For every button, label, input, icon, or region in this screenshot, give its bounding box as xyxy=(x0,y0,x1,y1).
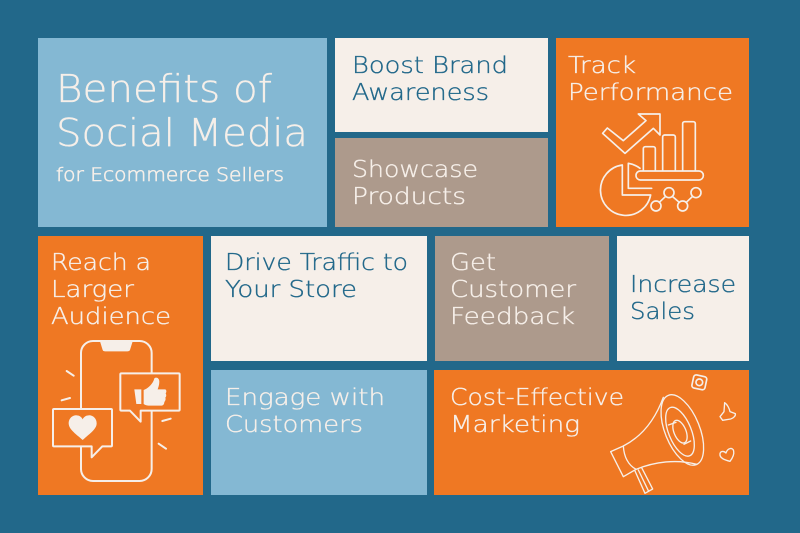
panel: Get Customer Feedback xyxy=(435,236,609,361)
panel: Increase Sales: Increase xyxy=(630,270,736,298)
panel: Increase Sales: Sales xyxy=(630,297,695,325)
panel: Cost-Effective Marketing: Marketing xyxy=(450,410,580,438)
panel: Showcase Products: Products xyxy=(352,182,466,210)
subheading: for Ecommerce Sellers xyxy=(56,164,284,186)
icon: analytics chart xyxy=(600,114,703,215)
panel: Track Performance: Performance xyxy=(568,78,733,106)
panel: Get Customer Feedback: Feedback xyxy=(450,302,575,330)
panel: Track Performance: Track xyxy=(568,51,636,79)
panel: Engage with Customers: Engage with xyxy=(225,383,385,411)
panel: Boost Brand Awareness: Boost Brand xyxy=(352,51,508,79)
panel: Cost-Effective Marketing: Cost-Effective xyxy=(450,383,624,411)
heading: Benefits of Social Media xyxy=(56,67,308,155)
panel: Drive Traffic to Your Store: Your Store xyxy=(225,275,357,303)
icon: phone with reactions xyxy=(53,341,180,481)
panel: title xyxy=(38,38,327,227)
panel: Reach a Larger Audience: Audience xyxy=(51,302,171,330)
heading: Benefits of Social Media: Benefits of xyxy=(56,67,273,111)
panel: Increase Sales xyxy=(617,236,749,361)
icon: megaphone xyxy=(611,374,735,493)
panel: Reach a Larger Audience xyxy=(38,236,203,495)
panel: Boost Brand Awareness: Awareness xyxy=(352,78,489,106)
panel: Track Performance xyxy=(556,38,749,227)
panel: Get Customer Feedback: Get xyxy=(450,248,496,276)
panel: Cost-Effective Marketing xyxy=(434,370,749,495)
panel: Reach a Larger Audience: Larger xyxy=(51,275,134,303)
panel: Showcase Products xyxy=(335,138,548,227)
panel: Engage with Customers: Customers xyxy=(225,410,363,438)
panel: Engage with Customers xyxy=(211,370,427,495)
panel: Reach a Larger Audience: Reach a xyxy=(51,248,151,276)
panel: Drive Traffic to Your Store xyxy=(211,236,427,361)
panel: Get Customer Feedback: Customer xyxy=(450,275,576,303)
panel: Drive Traffic to Your Store: Drive Traffic to xyxy=(225,248,408,276)
heading: Benefits of Social Media: Social Media xyxy=(56,111,308,155)
panel: Boost Brand Awareness xyxy=(335,38,548,132)
panel: Showcase Products: Showcase xyxy=(352,155,478,183)
